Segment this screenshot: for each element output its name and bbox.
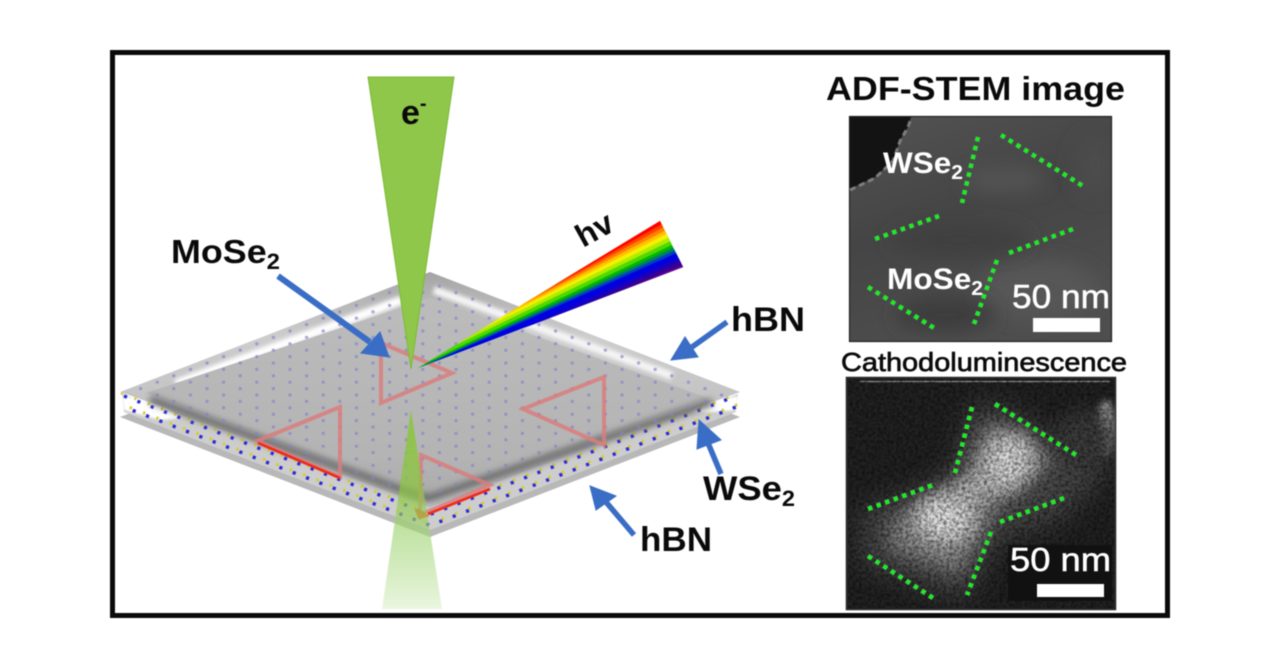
label: WSe2: 2: [782, 486, 795, 511]
dim halo: [860, 400, 1115, 600]
front edge shadow: [150, 399, 712, 498]
MoSe2 triangles: [257, 343, 604, 515]
map top edge: [860, 380, 1110, 382]
bottom hBN sheet: [120, 297, 740, 537]
vacuum region: [850, 117, 911, 189]
heading: ADF-STEM image: ADF-STEM image: [826, 70, 1125, 107]
label: MoSe2 in image: MoSe: [887, 263, 967, 296]
scale label: 50 nm: [1010, 541, 1111, 578]
dotted bright outlines: [868, 404, 1076, 598]
top sheet central area: [146, 298, 708, 500]
label: top hBN: hBN: [731, 301, 805, 339]
label: MoSe2: 2: [267, 249, 280, 274]
scale bar: [1037, 584, 1104, 597]
scale bar: [1033, 318, 1100, 332]
heading: Cathodoluminescence: Cathodoluminescence: [841, 347, 1127, 377]
electron beam above sample: [368, 77, 454, 369]
dotted outlines: [868, 404, 1076, 598]
scale label: 50 nm: [1012, 278, 1110, 315]
map background: [846, 378, 1116, 610]
electron label: -: [420, 93, 427, 115]
panel: ADF-STEM micrograph: [850, 116, 1117, 342]
label: MoSe2: MoSe: [171, 233, 259, 270]
dotted bright outlines: [868, 135, 1083, 328]
arrow: MoSe2: [278, 276, 389, 357]
micrograph contrast patches: [903, 170, 1088, 332]
arrow: top hBN: [671, 322, 727, 360]
micrograph background: [850, 116, 1112, 342]
panel: cathodoluminescence map: [846, 378, 1116, 610]
label: WSe2: WSe: [703, 470, 777, 508]
layered hBN / WSe2 heterostructure: [120, 272, 740, 537]
label: WSe2 in image: WSe: [883, 147, 948, 180]
label: WSe2 in image: 2: [951, 162, 963, 184]
scale label backing: [1008, 545, 1112, 601]
arrow: WSe2: [697, 420, 721, 474]
top hBN sheet: [120, 272, 740, 506]
photon rainbow cone: [418, 221, 683, 368]
dotted outlines: [868, 135, 1083, 328]
electron beam below sample: [382, 410, 442, 609]
photon label: hv: [569, 204, 620, 254]
label: MoSe2 in image: 2: [971, 278, 983, 300]
WSe2 layer edge with atoms: [121, 393, 739, 530]
electron label: e: [401, 94, 420, 132]
red lit triangle edges: [258, 443, 490, 519]
label: bottom hBN: hBN: [640, 521, 712, 559]
vacuum edge: [850, 118, 911, 190]
speckle: [848, 379, 1114, 608]
outer frame: [112, 52, 1168, 616]
hBN atom lattice: [120, 272, 740, 506]
arrow: bottom hBN: [590, 486, 634, 535]
bright hourglass emission: [890, 424, 1055, 575]
top sheet highlights: [176, 274, 672, 384]
